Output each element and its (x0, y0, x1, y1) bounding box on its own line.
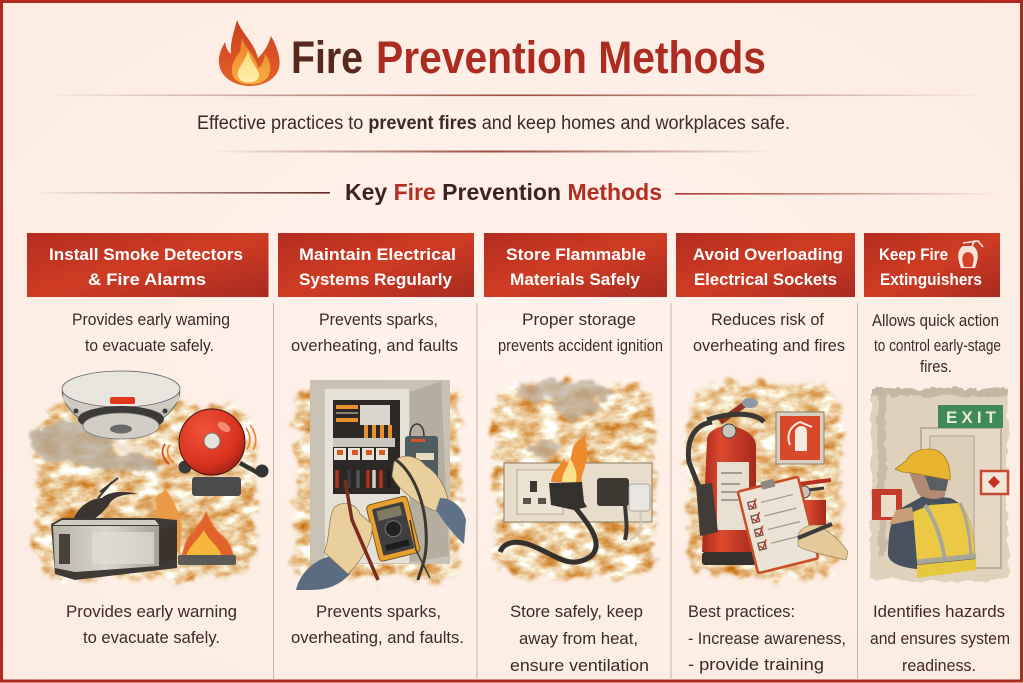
description: Reduces risk of (711, 310, 824, 329)
icon: exit sign: EXIT (946, 408, 997, 427)
icon: plugs and cords (500, 478, 650, 562)
description: Provides early waming (72, 310, 230, 329)
icon: exit sign (938, 405, 1003, 428)
heading (27, 233, 268, 297)
description: fires. (920, 357, 952, 376)
panel: fire extinguishers (864, 233, 1010, 675)
bottom note: away from heat, (519, 629, 638, 648)
icon: burning toaster (51, 478, 236, 580)
icon: extinguisher sign (776, 412, 824, 464)
icon: socket flame (551, 433, 587, 482)
bottom note: overheating, and faults. (291, 628, 464, 647)
title block (219, 20, 766, 86)
description: Proper storage (522, 310, 636, 329)
heading: Maintain Electrical (299, 245, 456, 264)
bottom note: Store safely, keep (510, 602, 643, 621)
icon: gloved hands with probes (296, 456, 466, 590)
heading: Materials Safely (510, 270, 641, 289)
panel: smoke detectors (27, 233, 268, 647)
panel: flammable materials (484, 233, 667, 675)
description (291, 310, 458, 355)
description: Allows quick action (872, 311, 999, 330)
bottom note: ensure ventilation (510, 656, 649, 675)
dividers (274, 303, 858, 680)
illustration: worker inspecting alarm call point (871, 388, 1008, 580)
bottom note: to evacuate safely. (83, 628, 220, 647)
heading (864, 233, 1000, 297)
heading (676, 233, 855, 297)
bottom note (510, 602, 649, 675)
heading: & Fire Alarms (88, 270, 206, 289)
heading: Electrical Sockets (694, 270, 837, 289)
icon: header extinguisher (958, 240, 983, 268)
bottom note (688, 602, 846, 674)
title text: Fire (291, 32, 363, 83)
bottom note: readiness. (902, 656, 976, 675)
description (72, 310, 230, 355)
description: prevents accident ignition (498, 336, 663, 355)
illustration: electrical panel and multimeter (296, 380, 466, 590)
icon: wall alarm marker (981, 471, 1008, 494)
icon: clipboard checklist (737, 473, 818, 573)
icon: flame (219, 20, 280, 86)
description: Prevents sparks, (319, 310, 438, 329)
bottom note (66, 602, 237, 647)
bottom note: Prevents sparks, (316, 602, 441, 621)
icon: fuse cabinet (310, 380, 450, 564)
icon: small extinguisher (792, 480, 831, 525)
panel: electrical systems (278, 233, 474, 647)
illustration: fire extinguisher and checklist (688, 384, 848, 578)
panel: overloaded sockets (676, 233, 855, 674)
icon: alarm bell (162, 409, 268, 496)
icon: hand with pen (798, 524, 848, 560)
bottom note: - Increase awareness, (688, 629, 846, 648)
icon: multimeter (366, 496, 421, 562)
bottom note: Best practices: (688, 602, 795, 621)
heading: Extinguishers (880, 270, 982, 289)
description: overheating and fires (693, 336, 845, 355)
icon: smoke detector (62, 371, 180, 439)
illustration: overheating wall socket (495, 381, 655, 578)
description: to evacuate safely. (85, 336, 214, 355)
heading: Avoid Overloading (693, 245, 843, 264)
title text: Prevention Methods (376, 32, 766, 83)
bottom note: and ensures system (870, 629, 1010, 648)
icon: worker (888, 449, 976, 578)
heading: Install Smoke Detectors (49, 245, 243, 264)
bottom note: Identifies hazards (873, 602, 1005, 621)
bottom note (291, 602, 464, 647)
heading: Keep Fire (879, 245, 948, 264)
bottom note: - provide training (688, 655, 824, 674)
icon: large extinguisher (688, 398, 764, 565)
heading: Systems Regularly (299, 270, 453, 289)
icon: voltage tester (405, 424, 438, 486)
description (498, 310, 663, 355)
bottom note: Provides early warning (66, 602, 237, 621)
description: overheating, and faults (291, 336, 458, 355)
description (693, 310, 845, 355)
illustration: detector, bell and burning toaster (32, 371, 268, 580)
subtitle: Effective practices to prevent fires and keep homes and workplaces safe. (197, 113, 790, 134)
heading (278, 233, 474, 297)
bottom note (870, 602, 1010, 675)
icon: wall socket plate (504, 463, 652, 522)
description (872, 311, 1001, 376)
section heading: Key Fire Prevention Methods (345, 179, 662, 205)
heading (484, 233, 667, 297)
icon: call point (872, 489, 902, 520)
heading: Store Flammable (506, 245, 646, 264)
